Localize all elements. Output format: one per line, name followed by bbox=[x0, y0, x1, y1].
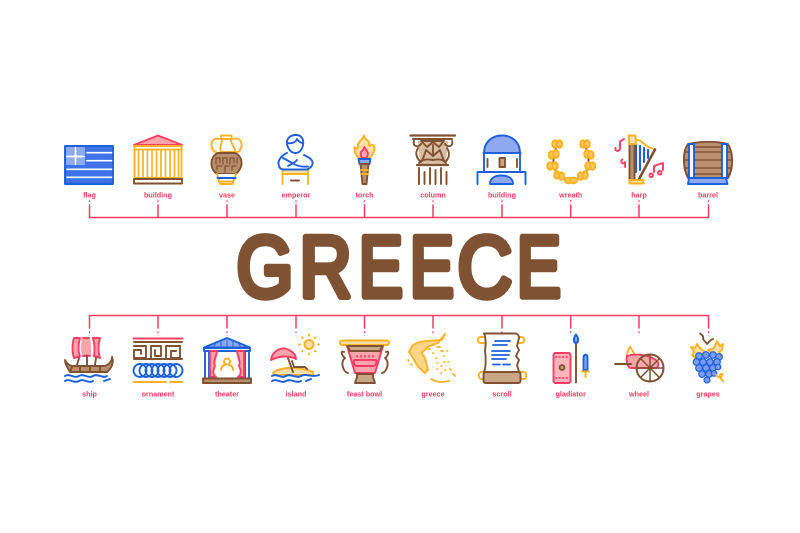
icon: theater bbox=[203, 338, 251, 383]
title: E bbox=[359, 220, 403, 315]
icon: chariot wheel bbox=[615, 347, 664, 382]
icon: barrel bbox=[684, 142, 732, 184]
labels: top row: harp bbox=[631, 190, 647, 199]
labels: top row: building bbox=[144, 190, 172, 199]
labels: top row: column bbox=[420, 190, 446, 199]
labels: bottom row: feast bowl bbox=[347, 389, 382, 398]
title: E bbox=[517, 220, 561, 315]
labels: top row: flag bbox=[83, 190, 96, 199]
labels: bottom row: gladiator bbox=[556, 389, 586, 398]
icon: greek ornament bbox=[134, 338, 182, 382]
labels: bottom row: grapes bbox=[696, 389, 720, 398]
title: C bbox=[458, 220, 512, 315]
labels: top row bbox=[83, 190, 718, 199]
panel: top row icons bbox=[65, 135, 732, 184]
icon: feast bowl bbox=[340, 340, 389, 383]
icon: corinthian column capital bbox=[410, 136, 455, 184]
labels: bottom row bbox=[82, 389, 720, 398]
icon: emperor bust bbox=[278, 135, 313, 184]
labels: bottom row: greece bbox=[421, 389, 445, 398]
labels: bottom row: island bbox=[286, 389, 306, 398]
title: G bbox=[236, 219, 293, 315]
labels: top row: emperor bbox=[282, 190, 311, 199]
icon: gladiator shield and spear bbox=[554, 334, 589, 383]
icon: temple building bbox=[134, 136, 182, 184]
icon: torch bbox=[354, 136, 375, 184]
icon: vase bbox=[211, 136, 242, 184]
labels: top row: barrel bbox=[698, 190, 718, 199]
labels: bottom row: ornament bbox=[142, 389, 175, 398]
labels: top row: torch bbox=[356, 190, 373, 199]
labels: bottom row: scroll bbox=[492, 389, 512, 398]
labels: bottom row: ship bbox=[82, 389, 97, 398]
labels: top row: wreath bbox=[558, 190, 582, 199]
icon: island bbox=[271, 334, 319, 382]
icon: harp bbox=[615, 136, 663, 184]
title: E bbox=[410, 220, 454, 315]
icon: scroll bbox=[478, 334, 526, 383]
connector: bottom bracket bbox=[90, 316, 708, 332]
icon: laurel wreath bbox=[547, 140, 595, 183]
icon: flag bbox=[65, 146, 113, 184]
labels: top row: building bbox=[488, 190, 516, 199]
labels: bottom row: theater bbox=[215, 389, 239, 398]
icon: greece map bbox=[408, 334, 455, 382]
icon: grapes bbox=[691, 334, 723, 383]
icon: domed building bbox=[478, 136, 526, 184]
title bbox=[236, 218, 561, 315]
title: R bbox=[300, 218, 352, 315]
panel: bottom row icons bbox=[65, 334, 723, 383]
labels: bottom row: wheel bbox=[628, 389, 649, 398]
icon: ship bbox=[65, 338, 113, 382]
labels: top row: vase bbox=[219, 190, 235, 199]
connector: top bracket bbox=[90, 201, 708, 218]
